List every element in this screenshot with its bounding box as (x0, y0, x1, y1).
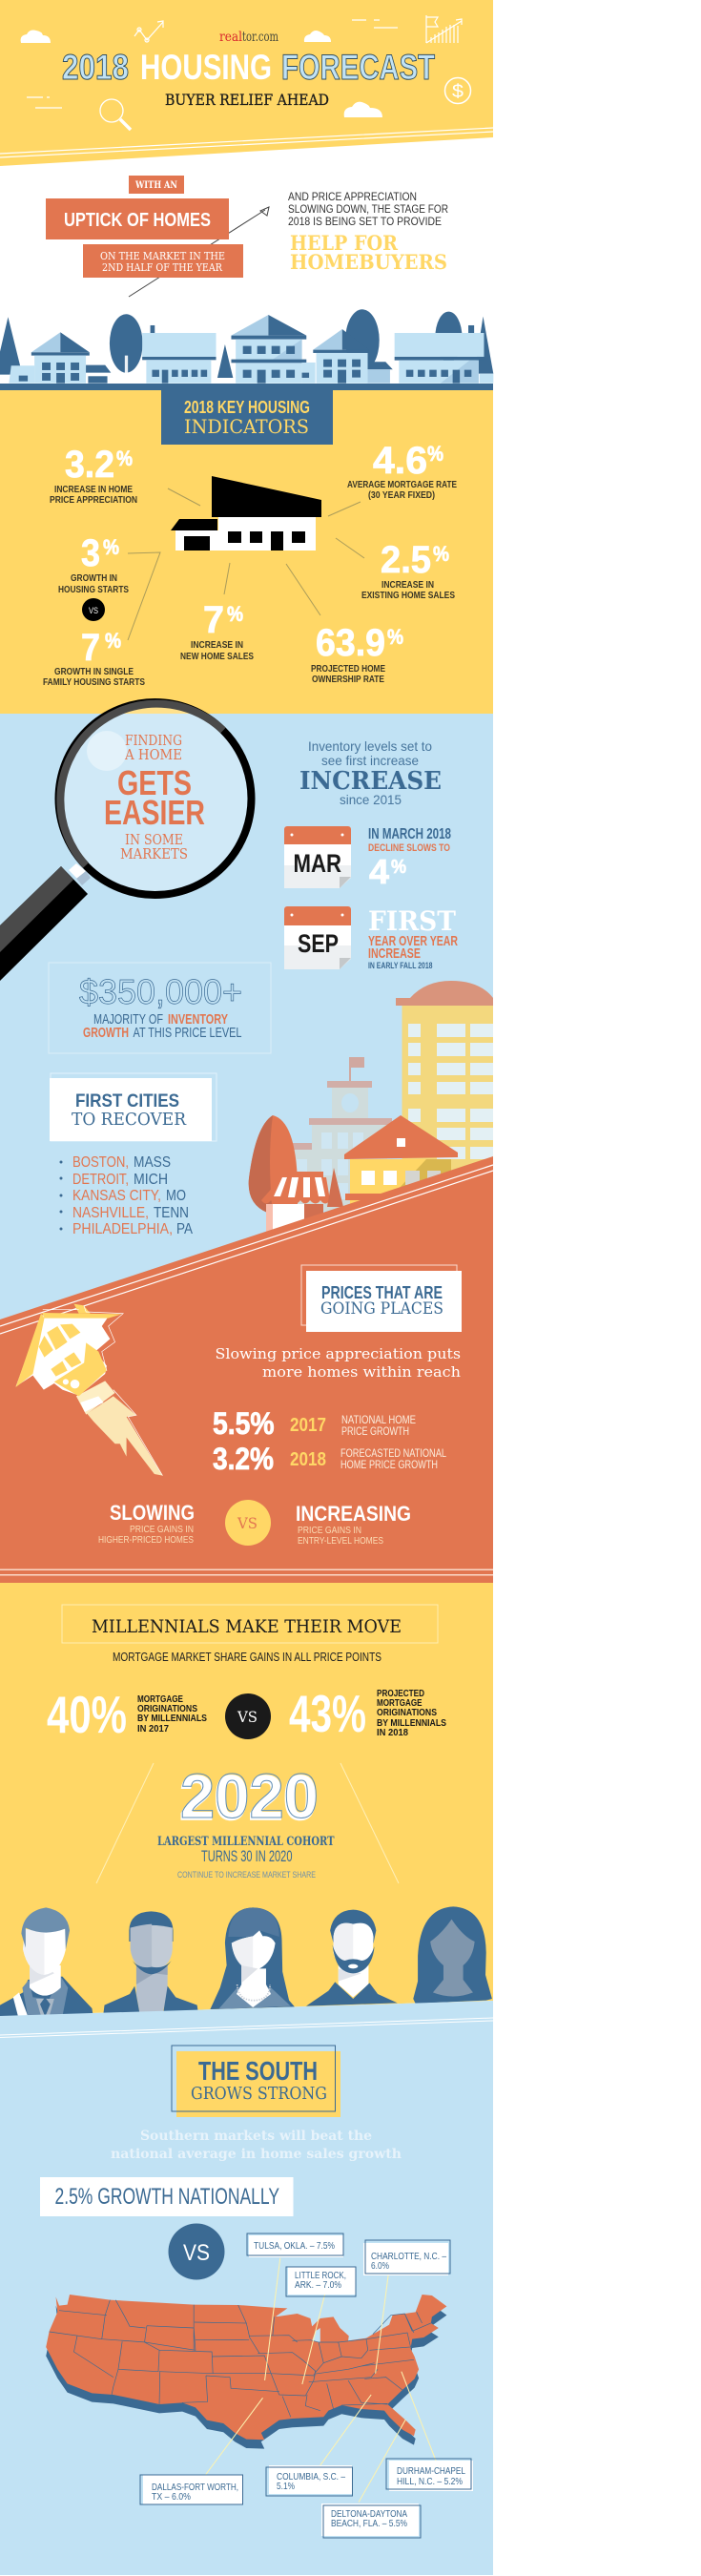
stat: ownership rate: % (387, 625, 403, 649)
illustration: neighborhood skyline (0, 309, 493, 384)
subtitle: BUYER RELIEF AHEAD (165, 91, 329, 109)
stat: new home sales: NEW HOME SALES (180, 652, 254, 662)
vs badge: VS (237, 1514, 258, 1532)
stat: 43 percent: 43% (289, 1684, 366, 1743)
illustration: house on the hill (344, 1115, 458, 1207)
heading: 2020: 2020 (180, 1760, 319, 1831)
list: cities: DETROIT, (72, 1172, 129, 1188)
text block: march: IN MARCH 2018 (368, 826, 451, 842)
icon: calendar march (284, 826, 352, 889)
list: cities: MO (166, 1188, 186, 1204)
text block: price appreciation: AND PRICE APPRECIATION (288, 190, 417, 203)
heading: gets easier: FINDING (125, 732, 182, 749)
comparison: increasing: PRICE GAINS IN (298, 1526, 361, 1536)
stat: mortgage rate: 4.6 (373, 440, 427, 482)
callout: price level: AT THIS PRICE LEVEL (134, 1025, 242, 1041)
logo: real (219, 30, 242, 45)
callout: price level (49, 963, 271, 1053)
vs badge: VS (237, 1708, 258, 1726)
illustration: orange tree (249, 1115, 298, 1215)
text block: march: % (391, 857, 406, 878)
stat: single family starts: GROWTH IN SINGLE (54, 667, 134, 677)
vs badge (225, 1693, 271, 1739)
decorative dashes (27, 20, 398, 108)
icon: calendar march: MAR (294, 849, 341, 878)
stat: 40 percent (47, 1685, 207, 1744)
stat: 2017 growth: 5.5% (213, 1406, 275, 1441)
person 3 (210, 1907, 295, 2009)
stat: price appreciation: % (116, 447, 133, 470)
text block: september: IN EARLY FALL 2018 (368, 961, 433, 970)
callout: price level: GROWTH (83, 1025, 129, 1041)
stat: 43 percent: ORIGINATIONS (377, 1707, 437, 1718)
label: dallas: TX – 6.0% (152, 2491, 191, 2503)
stat: 2017 growth: 2017 (290, 1415, 326, 1436)
callout: price level: $350,000+ (79, 972, 242, 1011)
decorative spread lines (96, 1763, 399, 1883)
stat: housing starts: 3 (81, 532, 100, 574)
callout: market timing: 2ND HALF OF THE YEAR (102, 261, 223, 274)
stat: single family starts: % (105, 629, 121, 653)
text block: cohort: LARGEST MILLENNIAL COHORT (157, 1835, 335, 1849)
text block: southern markets: national average in home sales growth (111, 2147, 402, 2162)
panel: finding a home (0, 702, 493, 1343)
text block: slowing appreciation: more homes within reach (262, 1363, 461, 1381)
stat: ownership rate: PROJECTED HOME (311, 664, 385, 675)
stat: 40 percent: ORIGINATIONS (137, 1703, 197, 1714)
stat: 40 percent: IN 2017 (137, 1723, 169, 1735)
stat: mortgage rate: (30 YEAR FIXED) (368, 490, 435, 501)
stat: price appreciation: PRICE APPRECIATION (50, 495, 137, 506)
title: FORECAST (281, 48, 435, 87)
panel: header (0, 0, 493, 166)
heading: prices that are going places (301, 1265, 462, 1332)
heading: gets easier: IN SOME (125, 831, 183, 848)
stat: 40 percent: 40% (47, 1685, 127, 1744)
text block: inventory increase: Inventory levels set to (308, 738, 432, 754)
logo (219, 30, 278, 45)
heading: the south grows strong: GROWS STRONG (191, 2084, 327, 2104)
text block: southern markets: Southern markets will beat the (140, 2129, 372, 2144)
list: cities: KANSAS CITY, (72, 1188, 161, 1204)
heading: gets easier (104, 732, 205, 862)
label: dallas (140, 2475, 243, 2504)
heading: gets easier: GETS (117, 763, 192, 802)
stat: housing starts (58, 532, 129, 595)
stat: 43 percent: MORTGAGE (377, 1697, 422, 1709)
callout: price level: INVENTORY (168, 1011, 228, 1028)
stat: single family starts (43, 627, 145, 688)
comparison: slowing: PRICE GAINS IN (130, 1525, 194, 1535)
comparison: slowing (98, 1501, 195, 1546)
illustration: millennial portraits (0, 1906, 492, 2020)
heading: gets easier: EASIER (104, 793, 205, 832)
icon: line chart arrow (134, 21, 163, 42)
title: HOUSING (140, 48, 272, 87)
text block: cohort: TURNS 30 IN 2020 (201, 1847, 292, 1865)
comparison: increasing (296, 1502, 411, 1547)
person 4 (306, 1910, 398, 2006)
icon: flag and bar chart (426, 15, 462, 43)
map: united states (46, 2258, 446, 2503)
text block: march: 4 (369, 852, 389, 891)
illustration: city hall (291, 1057, 392, 1211)
stat: mortgage rate (347, 440, 457, 501)
label: dallas: DALLAS-FORT WORTH, (152, 2482, 238, 2493)
stat: ownership rate: 63.9 (316, 622, 385, 664)
stat: existing home sales (361, 539, 455, 601)
panel: the south (0, 2001, 493, 2575)
stat: 2018 growth: 3.2% (213, 1442, 274, 1476)
vs badge (225, 1500, 271, 1546)
label: durham (386, 2459, 473, 2491)
heading: first cities to recover: FIRST CITIES (75, 1091, 179, 1111)
text block: march: DECLINE SLOWS TO (368, 842, 450, 854)
vs badge (168, 2223, 225, 2280)
label: durham: DURHAM-CHAPEL (397, 2465, 465, 2477)
text block: cohort (157, 1835, 335, 1880)
callout: market timing: ON THE MARKET IN THE (100, 250, 225, 262)
stat: new home sales: INCREASE IN (191, 640, 243, 651)
list: cities: MASS (134, 1154, 171, 1171)
stat: existing home sales: INCREASE IN (381, 580, 434, 591)
label: columbia (266, 2465, 353, 2496)
panel: prices that are going places (0, 1156, 493, 1583)
stat: 43 percent: PROJECTED (377, 1688, 424, 1699)
heading: help for homebuyers: HOMEBUYERS (290, 250, 447, 274)
panel: millennials (0, 1583, 493, 2020)
text block: inventory increase: since 2015 (340, 792, 402, 807)
heading banner: INDICATORS (184, 415, 309, 438)
vs badge: VS (183, 2240, 210, 2266)
icon: dollar coin (444, 78, 471, 103)
person 2 (103, 1911, 198, 2013)
text block: cohort: CONTINUE TO INCREASE MARKET SHARE (177, 1870, 316, 1880)
stat: 2018 growth: HOME PRICE GROWTH (340, 1458, 438, 1471)
icon: clouds (21, 31, 382, 117)
heading: first cities to recover: TO RECOVER (72, 1110, 186, 1130)
callout: price level: MAJORITY OF (93, 1011, 163, 1028)
comparison: increasing: ENTRY-LEVEL HOMES (298, 1536, 383, 1547)
stat: new home sales: % (227, 602, 243, 626)
arrow (129, 207, 269, 297)
heading: the south grows strong (172, 2046, 340, 2117)
icon: magnifying glass (0, 702, 252, 981)
text block: september: FIRST (368, 905, 456, 937)
text block: southern markets (111, 2129, 402, 2162)
stat: price appreciation: 3.2 (65, 444, 114, 486)
list: cities: PA (176, 1221, 193, 1237)
house 2 (142, 333, 216, 384)
label: deltona: BEACH, FLA. – 5.5% (331, 2518, 407, 2529)
stat: price appreciation (50, 444, 137, 506)
heading: 2020: 2020 (179, 1762, 318, 1833)
text block: september: INCREASE (368, 945, 421, 962)
callout: uptick of homes: UPTICK OF HOMES (64, 210, 211, 231)
text block: price appreciation: SLOWING DOWN, THE STAGE FOR (288, 202, 448, 216)
stat: new home sales (180, 599, 254, 662)
subheading: MORTGAGE MARKET SHARE GAINS IN ALL PRICE POINTS (113, 1650, 381, 1664)
house 3 (231, 315, 306, 384)
connector lines (128, 488, 364, 640)
list: cities: TENN (154, 1205, 189, 1221)
callout: uptick of homes (46, 198, 229, 239)
label: charlotte: 6.0% (371, 2260, 389, 2272)
callout: national growth: 2.5% GROWTH NATIONALLY (55, 2184, 279, 2210)
icon: house rocket (16, 1304, 162, 1476)
person 1 (0, 1907, 93, 2020)
heading: prices that are going places: GOING PLACES (320, 1299, 443, 1319)
label: columbia: 5.1% (277, 2481, 295, 2492)
heading: gets easier: MARKETS (120, 845, 188, 862)
heading: help for homebuyers: HELP FOR (290, 231, 398, 255)
callout: with an (129, 176, 184, 194)
stat: housing starts: HOUSING STARTS (58, 585, 129, 595)
logo: tor.com (242, 30, 278, 45)
stat: existing home sales: % (433, 542, 449, 566)
stat: new home sales: 7 (203, 599, 224, 641)
stat: existing home sales: EXISTING HOME SALES (361, 591, 455, 601)
text block: slowing appreciation: Slowing price appreciation puts (216, 1345, 461, 1362)
comparison: increasing: INCREASING (296, 1502, 411, 1526)
label: charlotte (363, 2240, 450, 2275)
house 1 (9, 332, 111, 384)
stat: single family starts: FAMILY HOUSING STARTS (43, 677, 145, 688)
heading: first cities to recover (50, 1073, 216, 1141)
text block: inventory increase (299, 738, 442, 807)
heading: prices that are going places: PRICES THAT ARE (321, 1283, 443, 1302)
house 5 (395, 333, 484, 384)
heading: gets easier: A HOME (124, 746, 182, 763)
stat: 43 percent: BY MILLENNIALS (377, 1717, 446, 1729)
text block: inventory increase: INCREASE (299, 767, 442, 796)
list: cities (59, 1154, 193, 1237)
label: columbia: COLUMBIA, S.C. – (277, 2471, 345, 2483)
title (62, 48, 435, 87)
comparison: slowing: SLOWING (110, 1501, 195, 1525)
stat: 40 percent: BY MILLENNIALS (137, 1713, 207, 1724)
illustration: apartment tower (396, 981, 493, 1225)
callout: market timing (83, 244, 243, 278)
stat: price appreciation: INCREASE IN HOME (54, 485, 133, 495)
text block: march (368, 826, 451, 891)
label: deltona: DELTONA-DAYTONA (331, 2508, 407, 2520)
list: cities: MICH (134, 1172, 168, 1188)
stat: existing home sales: 2.5 (381, 539, 431, 581)
callout: national growth (40, 2177, 294, 2216)
icon: magnifier (100, 99, 131, 130)
stat: 2018 growth: FORECASTED NATIONAL (340, 1446, 446, 1460)
panel: intro (46, 176, 448, 297)
callout: with an: WITH AN (134, 180, 177, 191)
stat: housing starts: % (103, 535, 119, 559)
person 5 (413, 1906, 492, 2004)
label: little rock: LITTLE ROCK, (295, 2270, 346, 2281)
heading: millennials make their move (62, 1605, 438, 1643)
stat: 43 percent: IN 2018 (377, 1727, 408, 1738)
stat: ownership rate: OWNERSHIP RATE (312, 675, 384, 685)
heading banner (161, 390, 333, 445)
stat: housing starts: GROWTH IN (71, 573, 117, 584)
label: tulsa (247, 2233, 343, 2257)
icon: dollar coin: $ (452, 82, 464, 102)
label: durham: HILL, N.C. – 5.2% (397, 2476, 463, 2487)
stat: 2017 growth: PRICE GROWTH (341, 1424, 409, 1438)
stat: 2018 growth (213, 1442, 446, 1476)
vs badge (82, 598, 105, 621)
label: charlotte: CHARLOTTE, N.C. – (371, 2251, 446, 2262)
stat: mortgage rate: % (427, 442, 443, 466)
text block: price appreciation: 2018 IS BEING SET TO PROVIDE (288, 215, 442, 228)
icon: calendar september (284, 906, 352, 970)
text block: price appreciation (288, 190, 448, 228)
panel: key housing indicators (0, 384, 493, 714)
list: cities: NASHVILLE, (72, 1205, 149, 1221)
label: little rock: ARK. – 7.0% (295, 2279, 341, 2291)
illustration: shop with awning (261, 1168, 343, 1233)
text block: slowing appreciation (216, 1345, 461, 1381)
label: little rock (286, 2267, 356, 2296)
list: cities: BOSTON, (72, 1154, 129, 1171)
stat: 43 percent (289, 1684, 446, 1743)
heading: millennials make their move: MILLENNIALS MAKE THEIR MOVE (92, 1616, 402, 1637)
heading: the south grows strong: THE SOUTH (198, 2056, 318, 2086)
stat: 40 percent: MORTGAGE (137, 1693, 183, 1705)
label: deltona (321, 2503, 421, 2538)
comparison: slowing: HIGHER-PRICED HOMES (98, 1535, 194, 1546)
icon: calendar september: SEP (298, 929, 339, 958)
text block: september (368, 905, 458, 970)
house 4 (302, 329, 393, 384)
title: 2018 (62, 48, 129, 87)
stat: 2018 growth: 2018 (290, 1449, 326, 1470)
vs badge: VS (89, 606, 98, 615)
text block: september: YEAR OVER YEAR (368, 933, 458, 949)
stat: 2017 growth: NATIONAL HOME (341, 1413, 416, 1426)
text block: inventory increase: see first increase (321, 753, 419, 768)
heading banner: 2018 KEY HOUSING (184, 398, 310, 417)
label: tulsa: TULSA, OKLA. – 7.5% (254, 2240, 335, 2252)
stat: single family starts: 7 (81, 627, 100, 669)
list: cities: PHILADELPHIA, (72, 1221, 173, 1237)
stat: 2017 growth (213, 1406, 416, 1441)
stat: ownership rate (311, 622, 403, 685)
icon: modern house (171, 476, 321, 551)
stat: mortgage rate: AVERAGE MORTGAGE RATE (347, 480, 457, 490)
heading: help for homebuyers (290, 231, 447, 274)
